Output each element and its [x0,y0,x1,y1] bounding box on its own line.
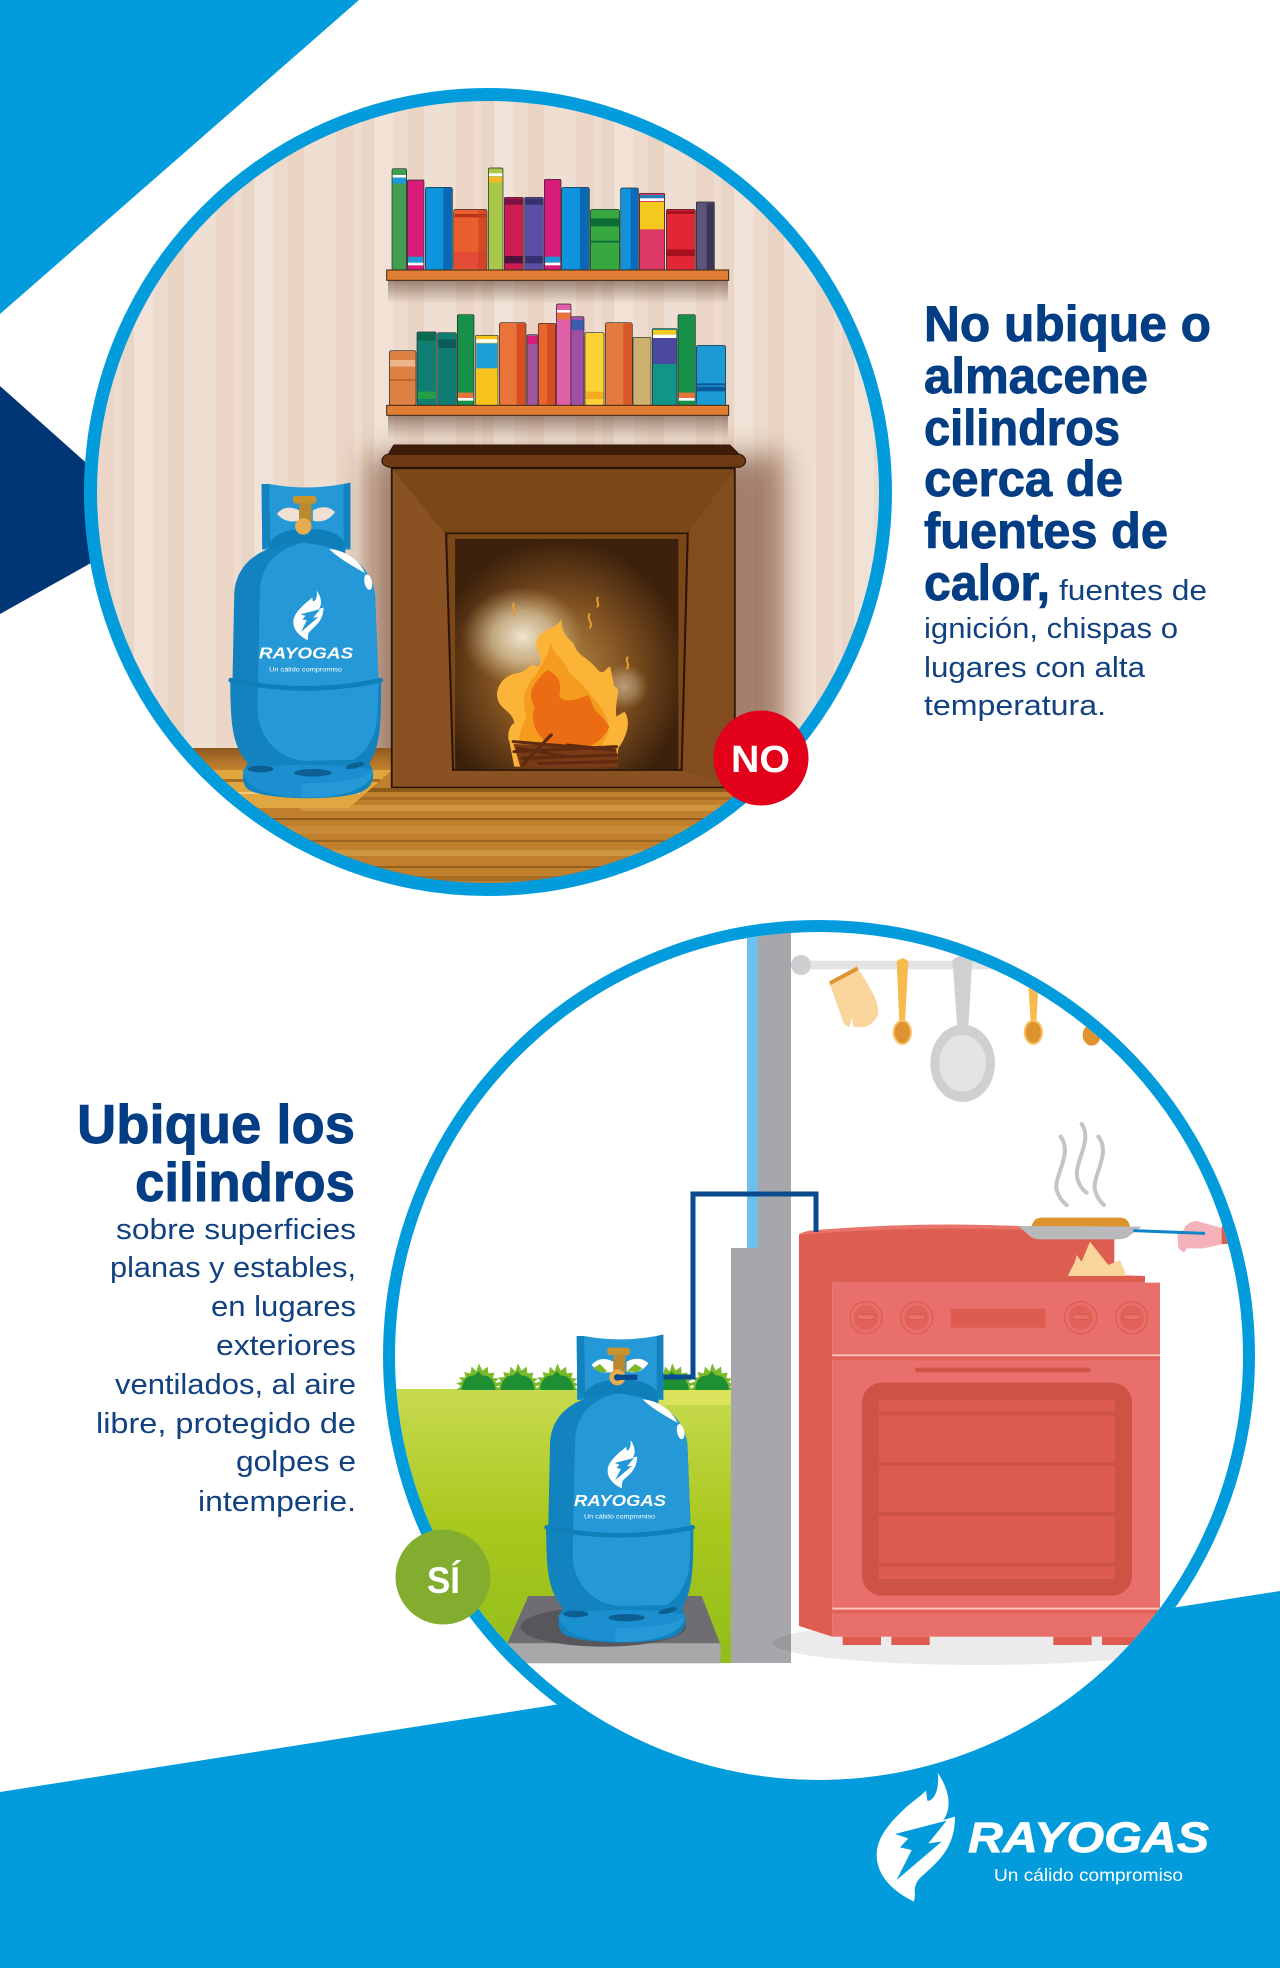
cylinder: NO scene: RAYOGAS [259,645,354,662]
ring: NO circle [90,94,886,890]
rod [810,960,992,970]
bottom row details [390,310,725,405]
spoon 2 [1028,988,1038,1020]
heading: no ubique: cerca de [924,451,1123,507]
floor shadow [773,1621,1187,1665]
cylinder: SI scene: Un cálido compromiso [584,1514,656,1521]
body text: ubique los cilindros: planas y estables, [110,1252,356,1284]
stove flame [1068,1242,1127,1276]
wall pillar upper [758,900,791,1248]
background: bottom blue band [0,1591,1280,1968]
bottom row of books [389,304,726,405]
footer logo: Rayogas [877,1773,1209,1902]
mantel [382,445,746,467]
badge: NO [714,710,808,806]
badge: SI: SÍ [427,1560,462,1601]
fireplace body [392,468,735,787]
badge: NO: NO [731,739,790,781]
fireplace wall shadow [368,455,783,785]
knobs [850,1302,1148,1334]
body text: no ubique: temperatura. [924,690,1106,722]
body text: no ubique [924,575,1207,722]
bushes [456,1363,734,1390]
grass horizon [660,1390,732,1405]
hanging pan [952,956,972,1027]
door handle [915,1368,1091,1372]
cylinder: NO scene: Un cálido compromiso [269,666,342,673]
heading: no ubique: fuentes de [924,503,1168,559]
firebox frame [446,533,688,770]
secondary glow [612,666,646,707]
concrete platform [507,1596,721,1663]
icon: flame with lightning [877,1773,955,1902]
heading: ubique los cilindros [77,1093,355,1213]
heading: no ubique [924,296,1211,611]
light blue pipe [747,936,758,1248]
grass [380,1389,732,1663]
body text: ubique los cilindros: sobre superficies [116,1214,356,1246]
food [1032,1218,1130,1227]
panel: NO scene circle [84,88,900,900]
cylinder: SI scene [546,1335,693,1642]
shelves with books [387,168,729,439]
log pile base [513,744,618,767]
spoon 1 [897,958,908,1022]
trim lines [832,1354,1160,1356]
panel: SI scene circle [380,900,1249,1786]
heading: no ubique: cilindros [924,400,1120,456]
heading: ubique los cilindros: Ubique los [77,1093,355,1155]
fireplace [382,445,746,787]
gas hose [617,1194,816,1377]
pan handle [1133,1231,1205,1233]
body text: ubique los cilindros: ventilados, al aire [115,1369,356,1401]
body text: no ubique: lugares con alta [924,652,1146,684]
top shelf board [387,270,729,280]
bottom shelf board [387,405,729,415]
top row details [393,173,714,269]
flame middle [519,644,608,746]
body text: ubique los cilindros [96,1214,356,1518]
top shelf shadow [388,280,728,304]
heading: no ubique: calor, [924,555,1050,611]
feet [843,1637,881,1645]
kitchen utensils [791,955,1101,1102]
heading: ubique los cilindros: cilindros [135,1151,355,1213]
sparks [513,597,628,669]
frying pan with hand and steam [1018,1124,1231,1253]
body text: ubique los cilindros: intemperie. [198,1486,356,1518]
wordmark: RAYOGAS [968,1814,1209,1862]
fire glow [464,590,579,680]
tagline: Un cálido compromiso [994,1865,1183,1885]
wood floor [192,748,734,883]
wall pillar base [731,1248,791,1663]
heading: no ubique: almacene [924,348,1148,404]
background: top-left blue triangle [0,0,359,314]
ring: SI circle [389,926,1249,1786]
body text: ubique los cilindros: libre, protegido de [96,1408,356,1440]
spoon 3 [1083,1024,1101,1046]
top row of books [392,168,714,270]
badge: SI [396,1530,490,1624]
wallpaper [84,88,892,750]
sleeve [1222,1226,1231,1244]
steam [1056,1124,1104,1205]
oven door [862,1383,1132,1596]
logs [513,735,616,765]
display [951,1309,1045,1328]
hand [1177,1221,1227,1253]
body text: ubique los cilindros: golpes e [236,1446,356,1478]
background: navy triangle [0,386,157,614]
flame inner [531,670,609,748]
body text: ubique los cilindros: en lugares [211,1291,356,1323]
body text: ubique los cilindros: exteriores [216,1330,356,1362]
flame outer [497,618,628,767]
body text: no ubique: fuentes de [1059,575,1207,607]
body text: no ubique: ignición, chispas o [924,613,1178,645]
firebox interior [455,539,678,769]
oven mitt [829,962,878,1027]
heading: no ubique: No ubique o [924,296,1211,352]
cylinder: SI scene: RAYOGAS [574,1493,667,1510]
pan [1018,1226,1142,1239]
bottom shelf shadow [388,415,728,439]
cylinder: NO scene [230,483,381,798]
oven [799,1225,1160,1645]
